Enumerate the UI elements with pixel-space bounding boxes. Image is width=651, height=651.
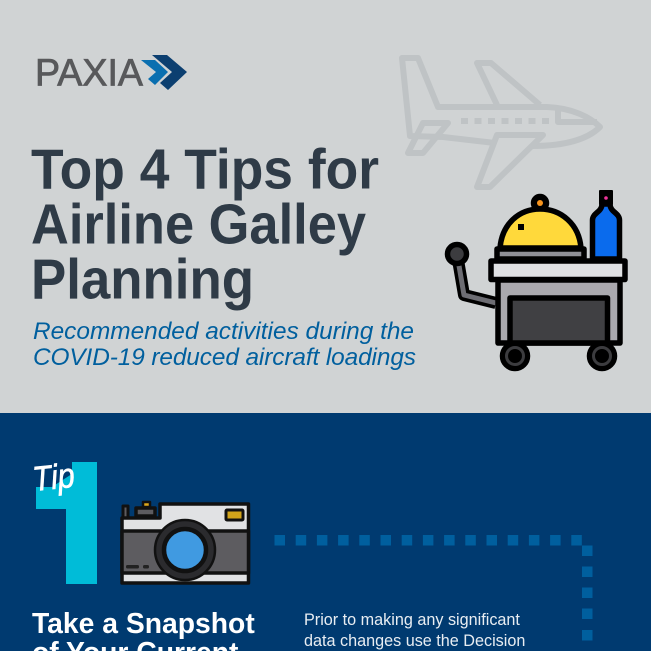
title: Top 4 Tips for xyxy=(31,138,379,202)
panel: tip 1 xyxy=(0,413,651,651)
cart tray xyxy=(491,261,625,280)
cart body xyxy=(498,280,620,343)
tip body text xyxy=(304,611,525,650)
cloche xyxy=(497,196,584,259)
subtitle xyxy=(33,318,416,371)
icon: airplane watermark xyxy=(402,58,600,187)
bottle xyxy=(592,190,620,259)
numeral 1 xyxy=(36,462,97,584)
panel: header xyxy=(0,0,651,413)
cart handle xyxy=(448,244,496,303)
title xyxy=(31,138,379,312)
subtitle: COVID-19 reduced aircraft loadings xyxy=(33,344,416,371)
subtitle: Recommended activities during the xyxy=(33,318,414,345)
tip body text: data changes use the Decision xyxy=(304,632,525,650)
tip label: Tip xyxy=(31,456,76,498)
title: Airline Galley xyxy=(31,192,366,256)
tip body text: Prior to making any significant xyxy=(304,611,520,629)
logo: Paxia: PAXIA xyxy=(35,52,144,94)
icon: galley cart xyxy=(448,190,625,368)
tip heading: Take a Snapshot xyxy=(32,607,255,639)
wheels xyxy=(502,344,614,368)
title: Planning xyxy=(31,248,254,312)
icon: camera xyxy=(122,502,248,583)
dotted connector xyxy=(274,535,592,640)
numeral 1: 1 xyxy=(23,427,120,622)
